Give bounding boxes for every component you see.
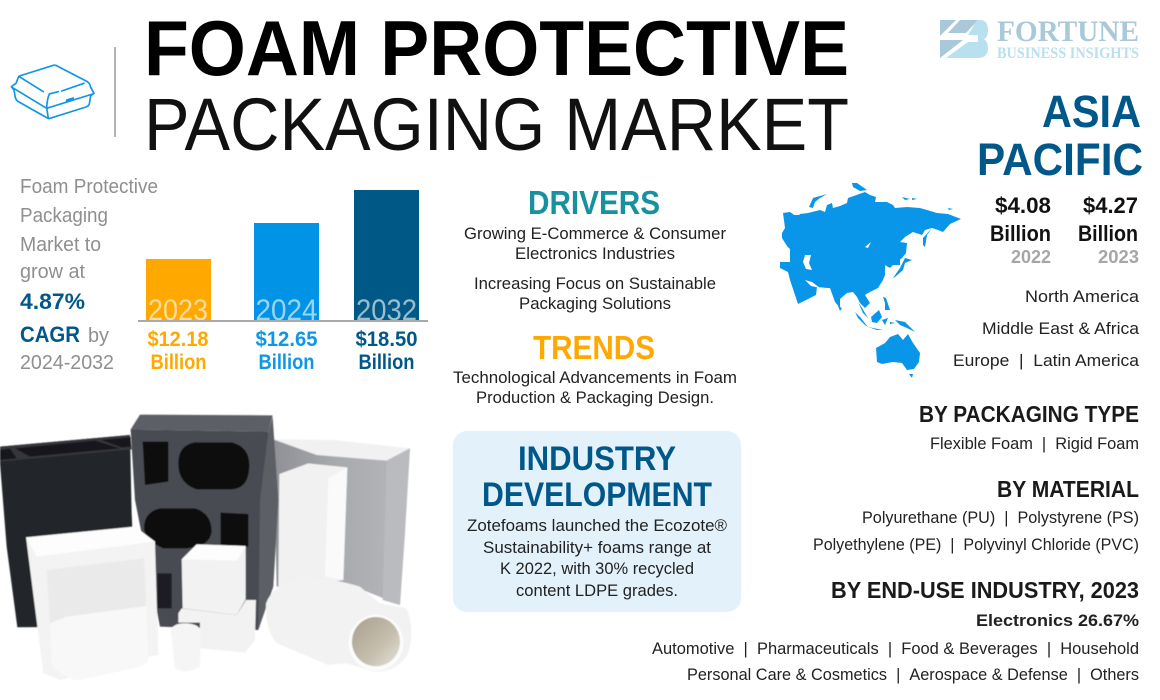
title (144, 4, 849, 166)
text block: drivers: Electronics Industries (515, 244, 675, 263)
title: FOAM PROTECTIVE (144, 4, 849, 92)
section: by end-use industry: Automotive | Pharmaceuticals | Food & Beverages | Household (652, 639, 1139, 658)
section: by end-use industry (652, 577, 1139, 684)
text block: trends (453, 368, 737, 407)
section: by end-use industry: Personal Care & Cosmetics | Aerospace & Defense | Others (687, 665, 1139, 684)
figures: 2022: $4.08 (995, 193, 1051, 218)
figures: 2023: 2023 (1098, 247, 1139, 267)
divider (114, 47, 116, 137)
figures: 2023 (1078, 193, 1139, 267)
panel: industry development (453, 431, 741, 612)
section: by material: BY MATERIAL (997, 476, 1139, 502)
text block: CAGR summary: Market to (20, 234, 101, 256)
text block: drivers: Growing E-Commerce & Consumer (464, 224, 726, 243)
bar 2023 (146, 259, 211, 374)
section: by end-use industry: Electronics 26.67% (976, 611, 1139, 630)
text block: CAGR summary: by (88, 325, 109, 347)
section: by packaging type (919, 401, 1139, 453)
heading: industry development: INDUSTRY (518, 440, 676, 478)
bar chart: market size (138, 190, 428, 374)
text block: trends: Technological Advancements in Foam (453, 368, 737, 387)
text block: Zotefoams: content LDPE grades. (516, 581, 678, 600)
text block: CAGR summary: Packaging (20, 205, 108, 227)
figures: 2023: Billion (1078, 221, 1138, 246)
text block: CAGR summary: 4.87% (20, 289, 85, 314)
figures: 2023: $4.27 (1083, 193, 1138, 218)
section: by material: Polyethylene (PE) | Polyvinyl Chloride (PVC) (813, 535, 1139, 554)
bar 2024: $12.65 (256, 328, 318, 351)
logo: Fortune Business Insights: FORTUNE (997, 15, 1139, 48)
figures: 2022: Billion (990, 221, 1051, 246)
heading: Asia Pacific: ASIA (1042, 86, 1141, 137)
text block: drivers (464, 224, 726, 313)
text block: CAGR summary: grow at (20, 261, 85, 283)
bar 2032 (354, 190, 419, 374)
section: by end-use industry: BY END-USE INDUSTRY, 2023 (831, 577, 1139, 603)
photo: foam packaging products (0, 415, 411, 681)
bar 2024: 2024 (256, 294, 318, 327)
text block: trends: Production & Packaging Design. (476, 388, 714, 407)
map: Asia Pacific (780, 183, 961, 378)
text block: CAGR summary: CAGR (20, 322, 80, 347)
bar 2023: $12.18 (148, 328, 209, 351)
text block: drivers: Increasing Focus on Sustainable (474, 274, 716, 293)
bar 2024: Billion (258, 351, 314, 374)
title: PACKAGING MARKET (144, 83, 849, 166)
text block: Zotefoams: Sustainability+ foams range at (483, 538, 711, 557)
text block: Zotefoams (467, 516, 727, 600)
bar 2023: 2023 (148, 294, 208, 327)
text block: CAGR summary: 2024-2032 (20, 352, 114, 374)
heading: Asia Pacific (977, 86, 1143, 185)
bar 2024 (254, 223, 319, 374)
logo: Fortune Business Insights (940, 15, 1139, 62)
section: by packaging type: BY PACKAGING TYPE (919, 401, 1139, 427)
text block: drivers: Packaging Solutions (519, 294, 671, 313)
text block: other regions: Europe | Latin America (953, 351, 1140, 370)
text block: other regions: North America (1025, 287, 1140, 306)
bar 2023: Billion (150, 351, 206, 374)
bar 2032: Billion (358, 351, 414, 374)
text block: other regions: Middle East & Africa (982, 319, 1140, 338)
section: by packaging type: Flexible Foam | Rigid Foam (930, 434, 1139, 453)
heading: trends: TRENDS (533, 329, 655, 366)
text block: Zotefoams: K 2022, with 30% recycled (500, 559, 694, 578)
section: by material (813, 476, 1139, 554)
text block: Zotefoams: Zotefoams launched the Ecozote® (467, 516, 727, 535)
figures: 2022 (990, 193, 1051, 267)
text block: CAGR summary (20, 176, 158, 374)
heading: industry development (482, 440, 712, 514)
text block: CAGR summary: Foam Protective (20, 176, 158, 198)
figures: 2022: 2022 (1011, 247, 1051, 267)
text block: other regions (953, 287, 1140, 370)
heading: Asia Pacific: PACIFIC (977, 134, 1143, 185)
logo: Fortune Business Insights: BUSINESS INSIGHTS (997, 45, 1139, 62)
heading: drivers: DRIVERS (528, 184, 660, 221)
section: by material: Polyurethane (PU) | Polystyrene (PS) (862, 508, 1139, 527)
icon: foam food container (11, 65, 94, 119)
bar 2032: $18.50 (356, 328, 418, 351)
bar 2032: 2032 (356, 294, 417, 327)
heading: industry development: DEVELOPMENT (482, 476, 712, 514)
